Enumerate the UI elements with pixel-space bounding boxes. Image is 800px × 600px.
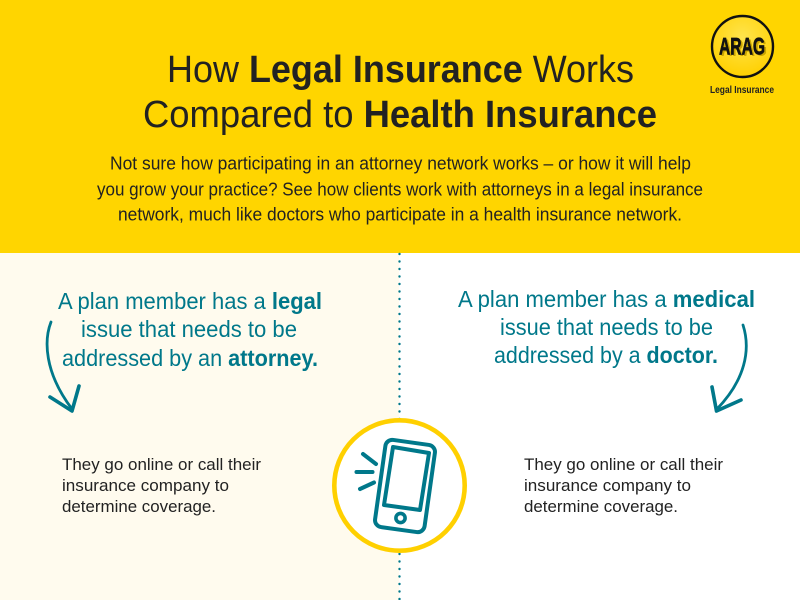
- logo: ARAG Legal Insurance: [710, 16, 774, 96]
- body text: legal side: They go online or call their: [62, 455, 261, 474]
- intro text: Not sure how participating in an attorney network works – or how it will help: [110, 154, 691, 174]
- title: How Legal Insurance Works: [167, 49, 634, 91]
- heading: medical issue: addressed by a doctor.: [494, 342, 718, 368]
- arrow: medical side: [712, 325, 746, 411]
- heading: medical issue: [458, 286, 755, 368]
- intro text: you grow your practice? See how clients work with attorneys in a legal insurance: [97, 180, 703, 200]
- body text: legal side: determine coverage.: [62, 497, 216, 516]
- panel: health side background: [399, 253, 800, 600]
- logo: ARAG Legal Insurance: ARAG: [719, 34, 765, 60]
- heading: medical issue: issue that needs to be: [500, 314, 713, 340]
- logo: ARAG Legal Insurance: ARAG: [721, 35, 767, 62]
- intro text: network, much like doctors who participate in a health insurance network.: [118, 204, 682, 224]
- body text: health side: They go online or call their: [524, 455, 723, 474]
- heading: legal issue: addressed by an attorney.: [62, 345, 318, 371]
- title: Compared to Health Insurance: [143, 94, 657, 136]
- body text: health side: determine coverage.: [524, 497, 678, 516]
- logo: ARAG Legal Insurance: Legal Insurance: [710, 84, 774, 96]
- body text: health side: insurance company to: [524, 476, 691, 495]
- body text: legal side: insurance company to: [62, 476, 229, 495]
- heading: medical issue: A plan member has a medical: [458, 286, 755, 312]
- body text: health side: [524, 455, 723, 516]
- divider: dotted centre line: [398, 254, 401, 600]
- intro text: [97, 154, 703, 224]
- heading: legal issue: [58, 288, 322, 371]
- heading: legal issue: A plan member has a legal: [58, 288, 322, 314]
- body text: legal side: [62, 455, 261, 516]
- icon: ringing phone in circle: [334, 420, 465, 551]
- panel: legal side background: [0, 253, 399, 600]
- panel: yellow header: [0, 0, 800, 253]
- arrow: legal side: [47, 322, 79, 411]
- heading: legal issue: issue that needs to be: [81, 316, 297, 342]
- title: [143, 49, 657, 136]
